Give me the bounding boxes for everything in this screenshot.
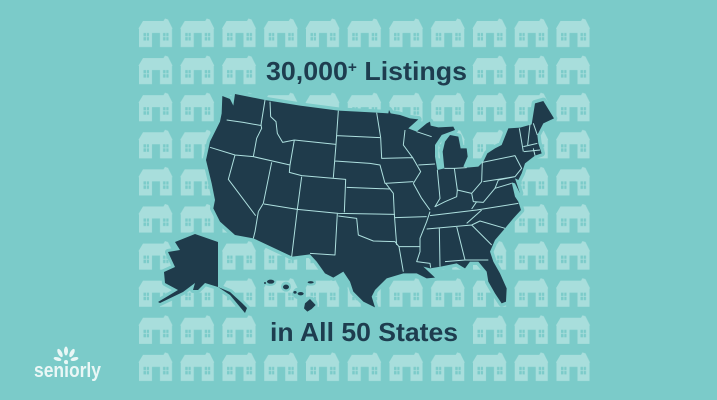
map: contiguous United States [206,94,554,307]
heading: 30,000+ Listings: 30,000 [266,56,346,86]
map: Alaska [158,234,247,313]
heading: 30,000+ Listings: + [348,59,357,76]
house pattern grid [138,18,591,382]
logo flower icon [53,346,79,364]
logo: seniorly [34,346,102,382]
map halo [158,94,554,313]
logo wordmark: seniorly [34,360,102,382]
heading backdrop [258,50,470,88]
footer heading backdrop [258,310,470,348]
heading: 30,000+ Listings: Listings [357,56,467,86]
map: Hawaii [264,280,316,312]
heading: in All 50 States: in All 50 States [270,317,458,347]
